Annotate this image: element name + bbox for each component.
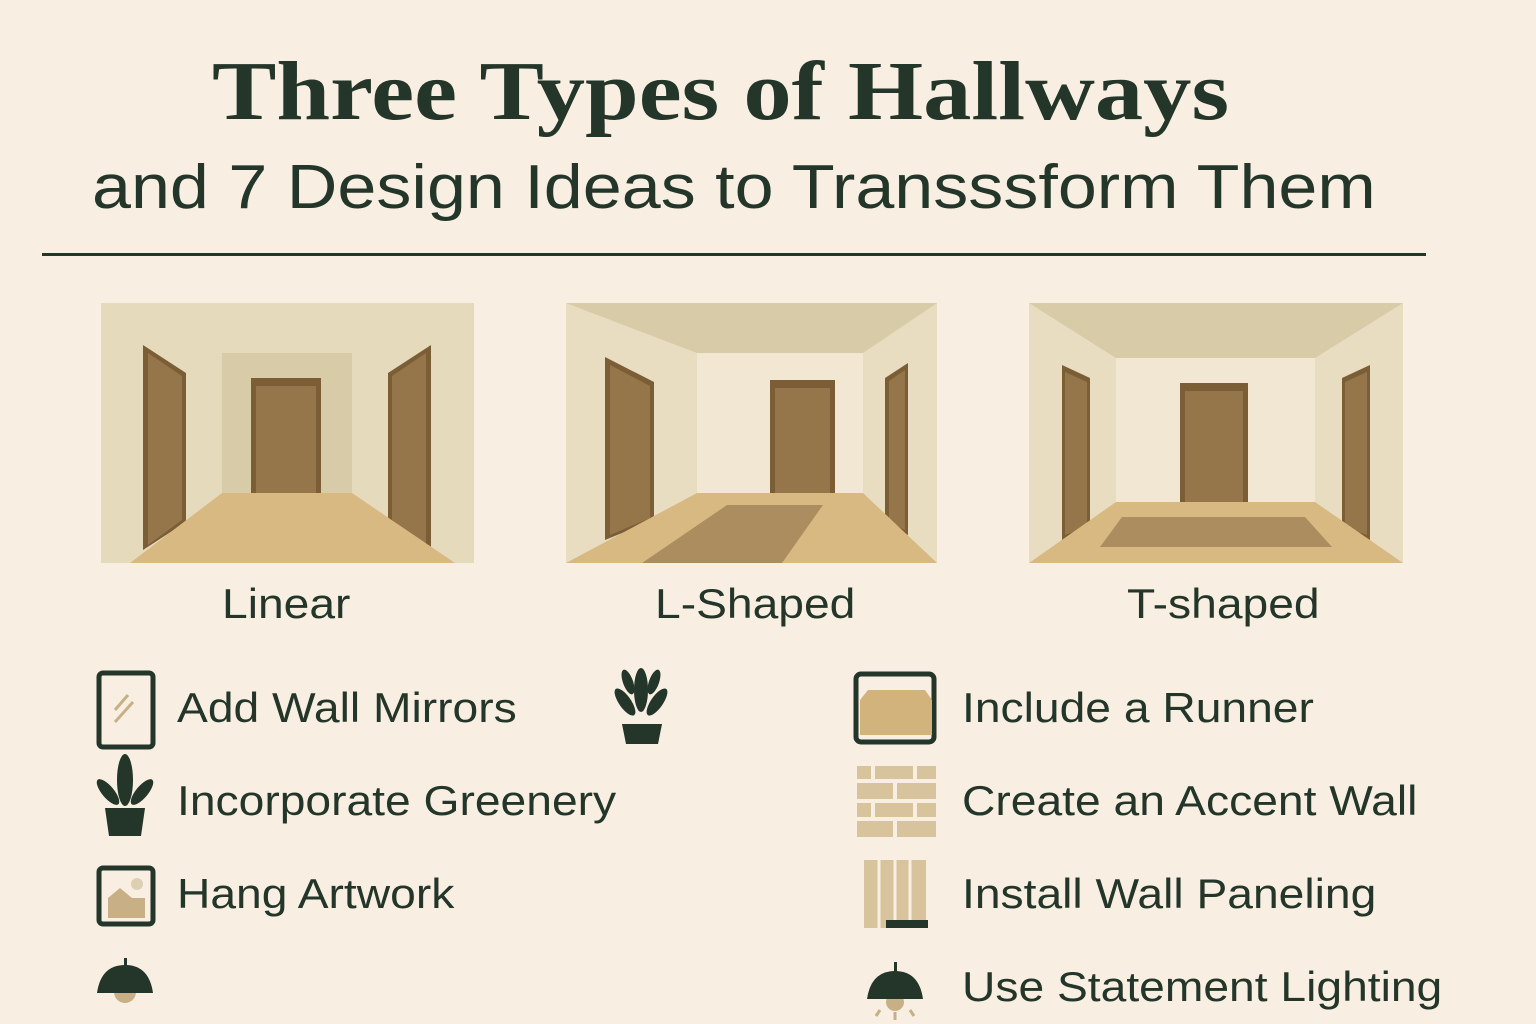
item: Incorporate Greenery: Incorporate Greenery <box>177 777 616 824</box>
item: Create an Accent Wall: Create an Accent Wall <box>962 777 1417 824</box>
icon: lamp left <box>97 958 153 1003</box>
label: Linear: Linear <box>222 580 350 627</box>
subtitle: and 7 Design Ideas to Transssform Them <box>92 153 1376 222</box>
item: Install Wall Paneling: Install Wall Paneling <box>962 870 1376 917</box>
icon: artwork <box>99 868 153 924</box>
icon: plant <box>611 668 671 744</box>
icon: paneling <box>864 860 928 928</box>
hallway illustrations <box>101 303 1403 563</box>
title: Three Types of Hallways <box>212 45 1229 138</box>
icons <box>96 668 936 1020</box>
item: Add Wall Mirrors: Add Wall Mirrors <box>177 684 517 731</box>
icon: mirror <box>99 673 153 747</box>
label: T-shaped: T-shaped <box>1127 580 1320 627</box>
icon: statement lamp <box>867 962 923 1020</box>
illustration: T-shaped hallway <box>1029 303 1403 563</box>
illustration: L-shaped hallway <box>566 303 937 563</box>
illustration: linear hallway <box>101 303 474 563</box>
icon: plant 2 <box>93 754 157 836</box>
icon: runner <box>856 674 934 742</box>
label: L-Shaped: L-Shaped <box>655 580 855 627</box>
icon: bricks <box>857 766 936 837</box>
item: Hang Artwork: Hang Artwork <box>177 870 454 917</box>
item: Use Statement Lighting: Use Statement Lighting <box>962 963 1442 1010</box>
item: Include a Runner: Include a Runner <box>962 684 1314 731</box>
